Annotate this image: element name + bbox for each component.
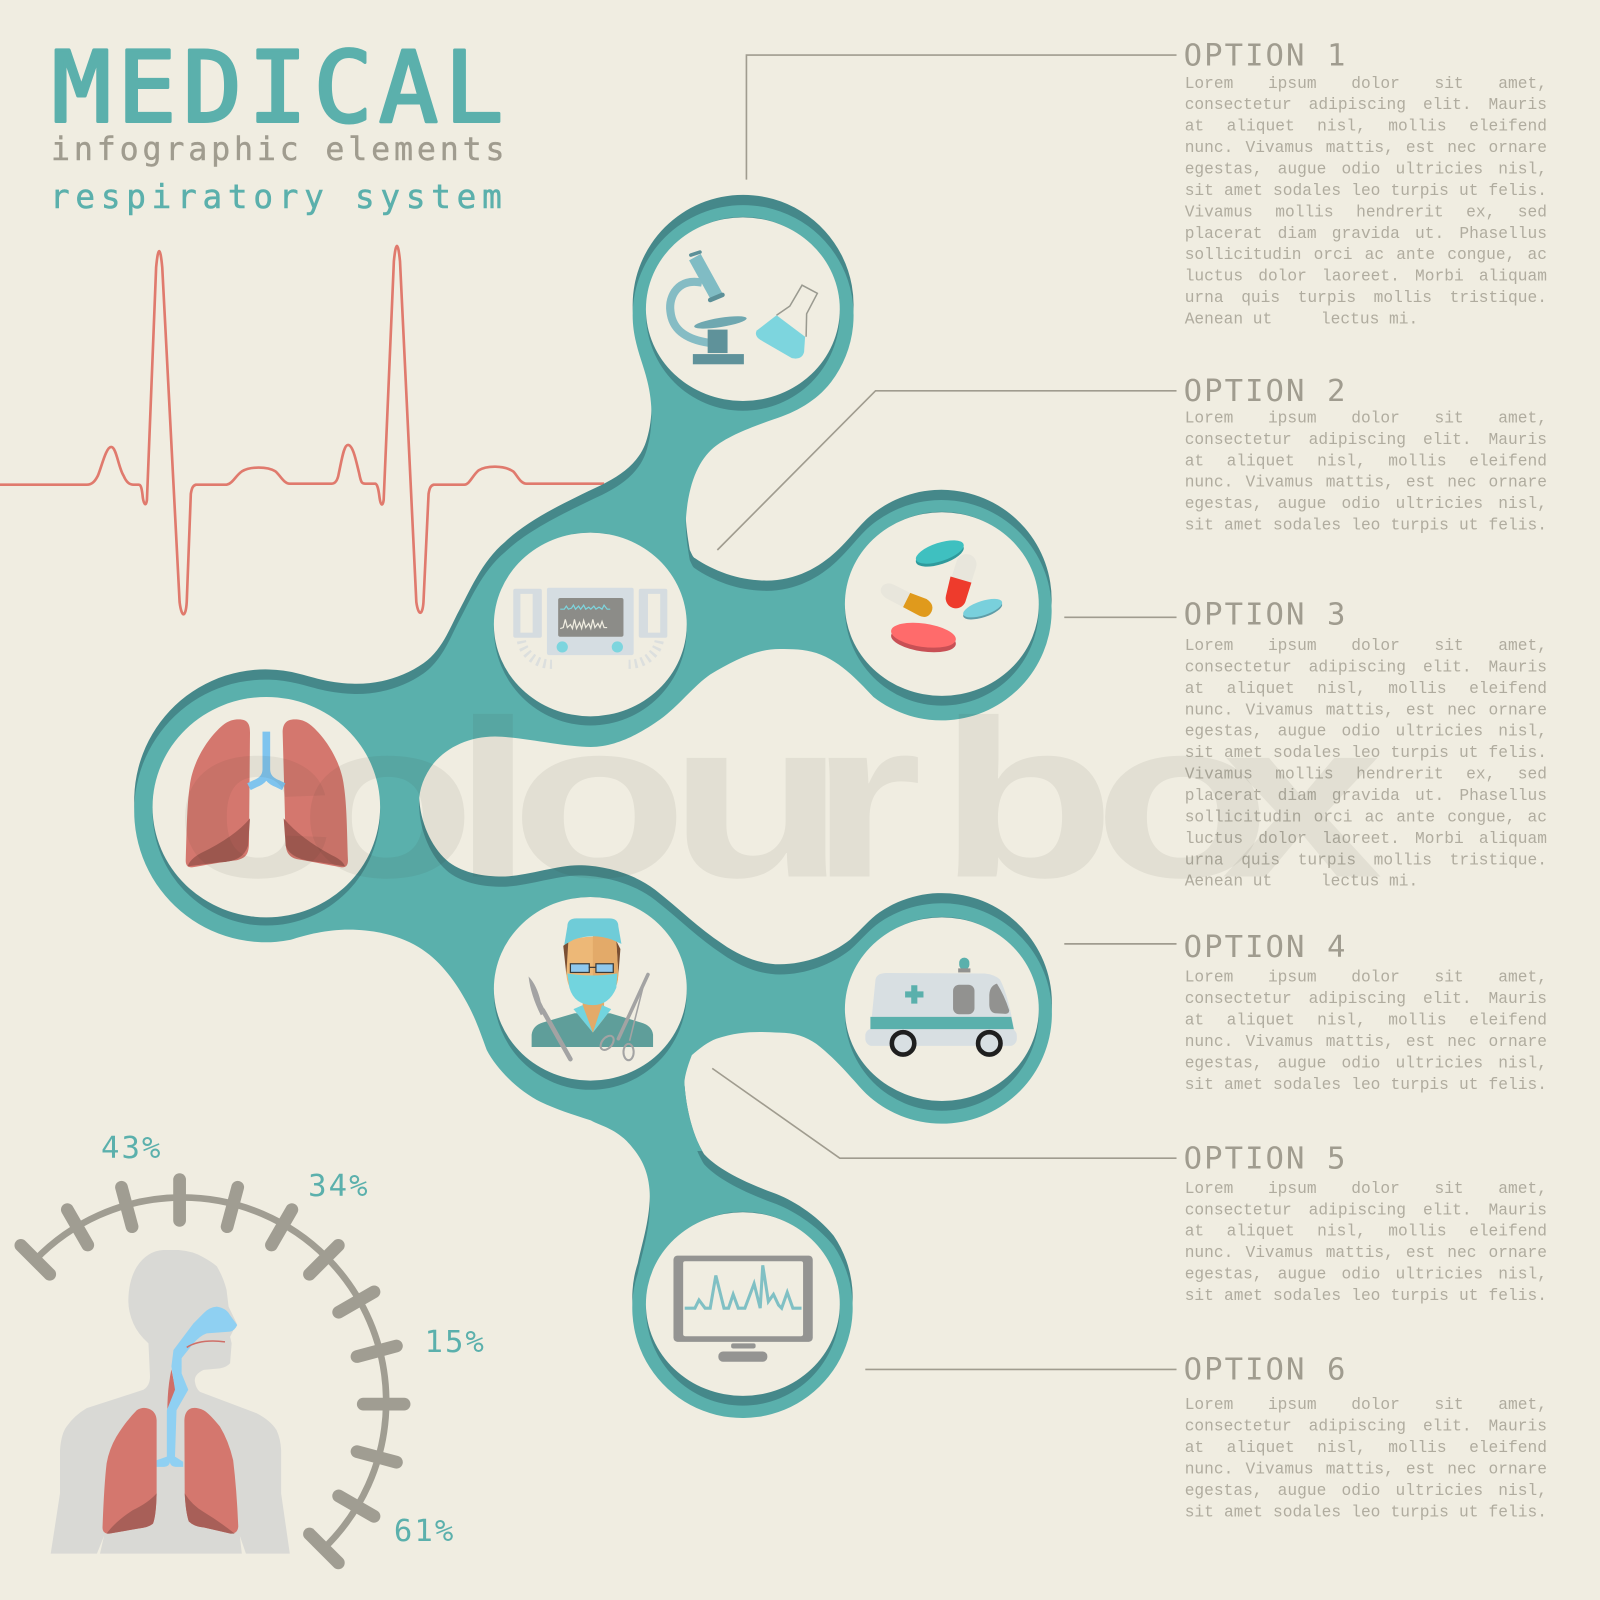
option 2 text block: nunc. Vivamus mattis, est nec ornare — [1185, 473, 1547, 491]
node shadows — [153, 217, 1039, 1406]
option 4 text block: sit amet sodales leo turpis ut felis. — [1185, 1075, 1547, 1093]
icon: microscope and flask — [670, 252, 817, 364]
label 43%: 43% — [101, 1131, 162, 1166]
option 3 text block: Aenean ut lectus mi. — [1185, 872, 1418, 890]
option 3 text block: consectetur adipiscing elit. Mauris — [1185, 658, 1547, 676]
option 1 text block: Lorem ipsum dolor sit amet, — [1185, 74, 1547, 92]
esophagus — [167, 1369, 176, 1411]
option 6 text block — [1184, 1352, 1547, 1521]
option 4 text block: OPTION 4 — [1184, 930, 1347, 965]
icon: vital signs screen — [673, 1256, 813, 1362]
option 4 text block: Lorem ipsum dolor sit amet, — [1185, 968, 1547, 986]
option 4 text block: nunc. Vivamus mattis, est nec ornare — [1185, 1032, 1547, 1051]
option 1 text block: egestas, augue odio ultricies nisl, — [1185, 160, 1547, 178]
option 6 text block: at aliquet nisl, mollis eleifend — [1185, 1438, 1547, 1457]
dark shadow edge of the branch shape — [134, 195, 1052, 1408]
option 3 text block: sollicitudin orci ac ante congue, ac — [1185, 808, 1547, 826]
option 1 text block: nunc. Vivamus mattis, est nec ornare — [1185, 138, 1547, 157]
option 1 text block: Vivamus mollis hendrerit ex, sed — [1185, 203, 1547, 221]
percentage labels — [101, 1131, 486, 1549]
option 1 text block: at aliquet nisl, mollis eleifend — [1185, 117, 1547, 135]
option 1 text block: OPTION 1 — [1184, 38, 1347, 73]
title — [50, 31, 510, 216]
option 5 text block: consectetur adipiscing elit. Mauris — [1185, 1201, 1547, 1219]
gauge ticks — [21, 1180, 404, 1563]
label 34%: 34% — [308, 1169, 370, 1204]
airway — [157, 1307, 237, 1467]
option 6 text block: sit amet sodales leo turpis ut felis. — [1185, 1503, 1547, 1521]
option 6 text block: egestas, augue odio ultricies nisl, — [1185, 1481, 1547, 1499]
option 1 text block: Aenean ut lectus mi. — [1185, 310, 1418, 328]
option 1 text block: urna quis turpis mollis tristique. — [1185, 288, 1547, 307]
option 3 text block: sit amet sodales leo turpis ut felis. — [1185, 743, 1547, 762]
leader line option 2 — [717, 391, 1177, 550]
lower notch teal edge — [684, 1082, 702, 1151]
option 5 text block: Lorem ipsum dolor sit amet, — [1185, 1179, 1547, 1197]
option 5 text block — [1184, 1141, 1547, 1305]
option 3 text block: at aliquet nisl, mollis eleifend — [1185, 679, 1547, 697]
body right lung shade — [185, 1493, 235, 1534]
option 1 text block: sollicitudin orci ac ante congue, ac — [1185, 245, 1547, 264]
option 3 text block: placerat diam gravida ut. Phasellus — [1185, 786, 1547, 805]
option 5 text block: sit amet sodales leo turpis ut felis. — [1185, 1286, 1547, 1305]
watermark: colourbox — [174, 673, 1384, 924]
leader line option 1 — [746, 55, 1177, 180]
icon: surgeon — [529, 918, 653, 1060]
icon: lungs — [186, 719, 348, 867]
option 4 text block: egestas, augue odio ultricies nisl, — [1185, 1054, 1547, 1072]
option 5 text block: egestas, augue odio ultricies nisl, — [1185, 1265, 1547, 1283]
option 1 text block — [1184, 38, 1547, 328]
option 3 text block: Lorem ipsum dolor sit amet, — [1185, 636, 1547, 655]
option 6 text block: OPTION 6 — [1184, 1352, 1347, 1388]
leader lines — [712, 55, 1177, 1369]
option 3 text block: OPTION 3 — [1184, 597, 1347, 633]
option 6 text block: nunc. Vivamus mattis, est nec ornare — [1185, 1460, 1547, 1478]
option 3 text block: Vivamus mollis hendrerit ex, sed — [1185, 765, 1547, 783]
option 2 text block: consectetur adipiscing elit. Mauris — [1185, 430, 1547, 448]
option 1 text block: luctus dolor laoreet. Morbi aliquam — [1185, 267, 1547, 285]
option 2 text block: Lorem ipsum dolor sit amet, — [1185, 409, 1547, 427]
option 3 text block: urna quis turpis mollis tristique. — [1185, 851, 1547, 869]
option 6 text block: Lorem ipsum dolor sit amet, — [1185, 1395, 1547, 1414]
leader line option 6 — [865, 1368, 1177, 1370]
leader line option 4 — [1064, 943, 1177, 945]
option 4 text block — [1184, 930, 1547, 1093]
option 2 text block: OPTION 2 — [1184, 373, 1347, 409]
icon: ambulance — [865, 958, 1017, 1055]
body left lung — [103, 1408, 157, 1534]
option 5 text block: at aliquet nisl, mollis eleifend — [1185, 1222, 1547, 1240]
label 15%: 15% — [424, 1325, 486, 1360]
teal branch shape — [134, 205, 1052, 1418]
option 3 text block: luctus dolor laoreet. Morbi aliquam — [1185, 829, 1547, 847]
option 1 text block: consectetur adipiscing elit. Mauris — [1185, 95, 1547, 114]
option 1 text block: sit amet sodales leo turpis ut felis. — [1185, 181, 1547, 199]
branching teal diagram — [134, 195, 1052, 1418]
option 2 text block: sit amet sodales leo turpis ut felis. — [1185, 516, 1547, 534]
gauge arc — [35, 1197, 386, 1548]
option 3 text block — [1184, 597, 1547, 890]
option 5 text block: OPTION 5 — [1184, 1141, 1347, 1177]
option 2 text block — [1184, 373, 1547, 534]
option 6 text block: consectetur adipiscing elit. Mauris — [1185, 1417, 1547, 1435]
option 1 text block: placerat diam gravida ut. Phasellus — [1185, 224, 1547, 242]
leader line option 3 — [1064, 616, 1177, 618]
option 3 text block: nunc. Vivamus mattis, est nec ornare — [1185, 701, 1547, 719]
gauge with human respiratory figure — [21, 1180, 404, 1563]
node discs — [153, 217, 1039, 1396]
icon: defibrillator monitor — [513, 588, 667, 664]
human silhouette — [51, 1250, 290, 1554]
option 4 text block: consectetur adipiscing elit. Mauris — [1185, 989, 1547, 1008]
body left lung shade — [107, 1493, 157, 1534]
ECG heartbeat line — [0, 246, 604, 614]
label 61%: 61% — [394, 1514, 455, 1549]
subheading: infographic elements: infographic elements — [51, 132, 508, 168]
option 4 text block: at aliquet nisl, mollis eleifend — [1185, 1011, 1547, 1029]
heading: MEDICAL: MEDICAL — [52, 31, 510, 145]
option 2 text block: at aliquet nisl, mollis eleifend — [1185, 452, 1547, 470]
body right lung — [184, 1408, 238, 1534]
icon: pills — [881, 536, 1004, 656]
mouth line — [187, 1341, 225, 1347]
option 3 text block: egestas, augue odio ultricies nisl, — [1185, 722, 1547, 740]
option 2 text block: egestas, augue odio ultricies nisl, — [1185, 494, 1547, 513]
leader line option 5 — [712, 1068, 1177, 1158]
option 5 text block: nunc. Vivamus mattis, est nec ornare — [1185, 1243, 1547, 1262]
subheading: respiratory system: respiratory system — [50, 178, 508, 216]
